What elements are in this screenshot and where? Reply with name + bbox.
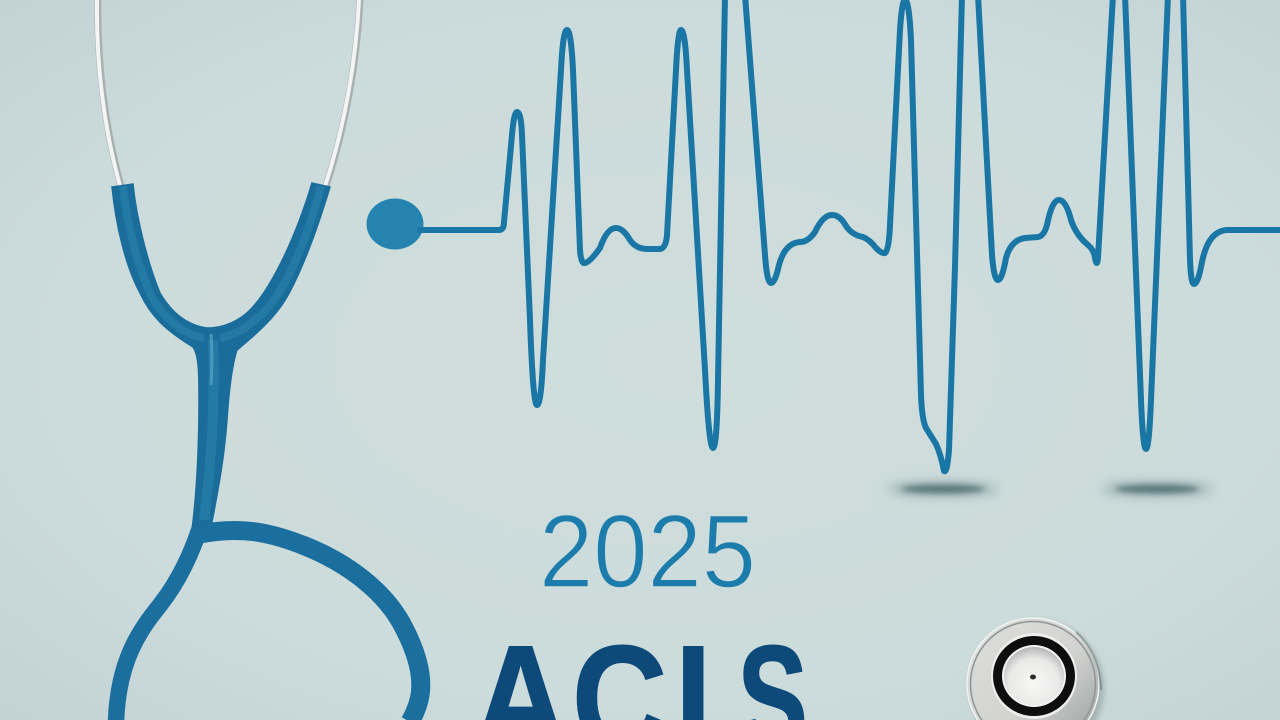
shadow under ECG dip 1 [887, 483, 999, 495]
lower tube loop [116, 518, 421, 720]
stethoscope chest piece [967, 618, 1104, 720]
ECG start dot [366, 198, 424, 250]
year: 2025 [539, 494, 756, 610]
stethoscope tubing [97, 0, 421, 720]
shadow under ECG dip 2 [1101, 483, 1213, 495]
ECG heartbeat line [420, 0, 1280, 471]
yoke and stem: blue Y tube [112, 183, 330, 530]
ear tubes: silver [97, 0, 360, 186]
